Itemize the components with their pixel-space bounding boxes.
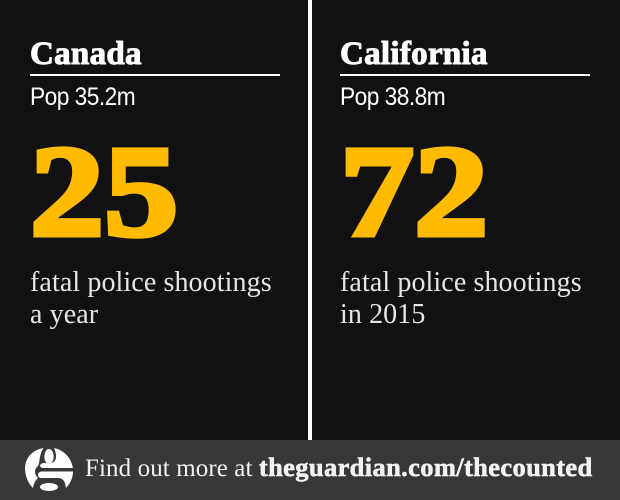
description: Canada <box>30 267 272 330</box>
footer bar <box>0 440 620 500</box>
panel: California <box>312 0 620 440</box>
heading: Canada: Canada <box>30 36 142 72</box>
icon: Guardian g logo <box>25 448 73 491</box>
population: Canada: Pop 35.2m <box>30 83 135 111</box>
description: California: fatal police shootings <box>340 267 582 298</box>
population: California: Pop 38.8m <box>340 83 445 111</box>
big number: 72: 72 <box>340 120 488 264</box>
panel: Canada <box>0 0 308 440</box>
heading: California: California <box>340 36 488 72</box>
divider rule: Canada <box>30 74 280 76</box>
divider rule: California <box>340 74 590 76</box>
big number: 25: 25 <box>30 120 178 264</box>
description: Canada: fatal police shootings <box>30 267 272 298</box>
description: California <box>340 267 582 330</box>
description: Canada: a year <box>30 299 98 330</box>
footer call to action: Find out more at theguardian.com/thecounted <box>85 452 593 482</box>
description: California: in 2015 <box>340 299 425 330</box>
panel divider <box>308 0 312 440</box>
